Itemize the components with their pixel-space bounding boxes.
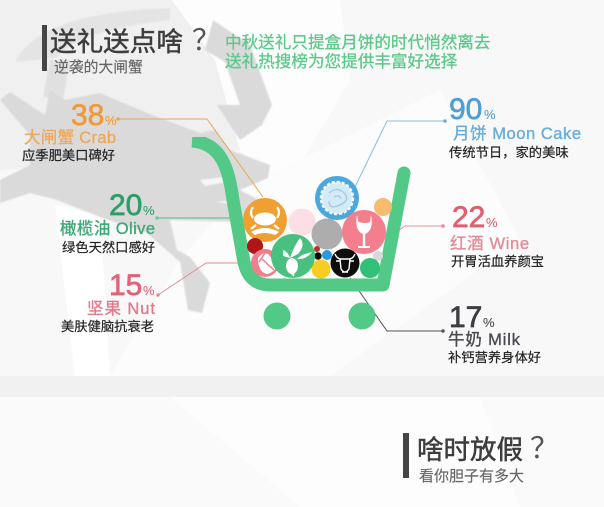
shopping cart [192,141,410,330]
label: milk 17%: 17 [449,301,482,334]
label: wine 22%: 22 [452,201,485,234]
label: crab 38%: 大闸蟹 Crab [24,128,116,147]
label: wine 22%: % [486,215,498,230]
label: nut 15%: % [143,283,155,298]
label: nut 15% [61,269,155,334]
line: crab [116,117,263,197]
icon: olive [271,234,315,278]
background crab silhouette [0,8,272,313]
label: crab 38%: 38 [71,99,104,132]
heading: top title: 送礼送点啥 [50,27,183,57]
label: olive 20% [60,189,155,255]
icon: wine glass [342,210,386,254]
label: wine 22%: 红酒 Wine [450,234,529,253]
heading: top title: ？ [192,25,221,57]
intro text [225,33,490,71]
label: crab 38%: 应季肥美口碑好 [22,148,115,163]
icon: nut [251,249,279,277]
label: olive 20%: 20 [109,189,142,222]
label: moon cake 90%: % [484,107,496,122]
label: nut 15%: 美肤健脑抗衰老 [61,318,154,334]
icon: moon cake [315,176,359,220]
line: olive [155,216,235,220]
heading: top title: 逆袭的大闸蟹 [54,59,143,76]
label: wine 22% [450,201,544,269]
heading: holiday title: 看你胆子有多大 [419,468,524,485]
label: moon cake 90%: 传统节日，家的美味 [449,144,569,160]
line: wine [385,224,445,240]
label: olive 20%: % [143,203,155,218]
cart balls [243,176,392,278]
icon: dark red ball [247,238,263,254]
label: olive 20%: 绿色天然口感好 [62,239,155,255]
leader lines [116,117,447,333]
label: wine 22%: 开胃活血养颜宝 [451,254,544,269]
label: moon cake 90% [449,93,581,160]
heading: holiday title: ？ [530,433,559,465]
icon: bull [330,248,360,278]
label: milk 17% [448,301,541,365]
icon: crab [243,198,287,242]
label: olive 20%: 橄榄油 Olive [60,219,155,238]
line: nut [156,263,250,297]
label: crab 38%: % [105,113,117,128]
line: milk [350,278,445,333]
label: crab 38% [22,99,117,163]
label: nut 15%: 15 [109,269,142,302]
line: moon cake [355,119,447,187]
heading: holiday title [403,433,559,485]
intro text: 送礼热搜榜为您提供丰富好选择 [225,52,458,71]
label: milk 17%: % [483,315,495,330]
heading: top title [42,25,221,76]
label: milk 17%: 牛奶 Milk [448,330,521,349]
label: milk 17%: 补钙营养身体好 [448,350,541,365]
label: nut 15%: 坚果 Nut [87,299,155,318]
heading: holiday title: 啥时放假 [417,435,523,465]
intro text: 中秋送礼只提盒月饼的时代悄然离去 [225,33,490,52]
label: moon cake 90%: 月饼 Moon Cake [453,124,581,143]
label: moon cake 90%: 90 [449,93,482,126]
